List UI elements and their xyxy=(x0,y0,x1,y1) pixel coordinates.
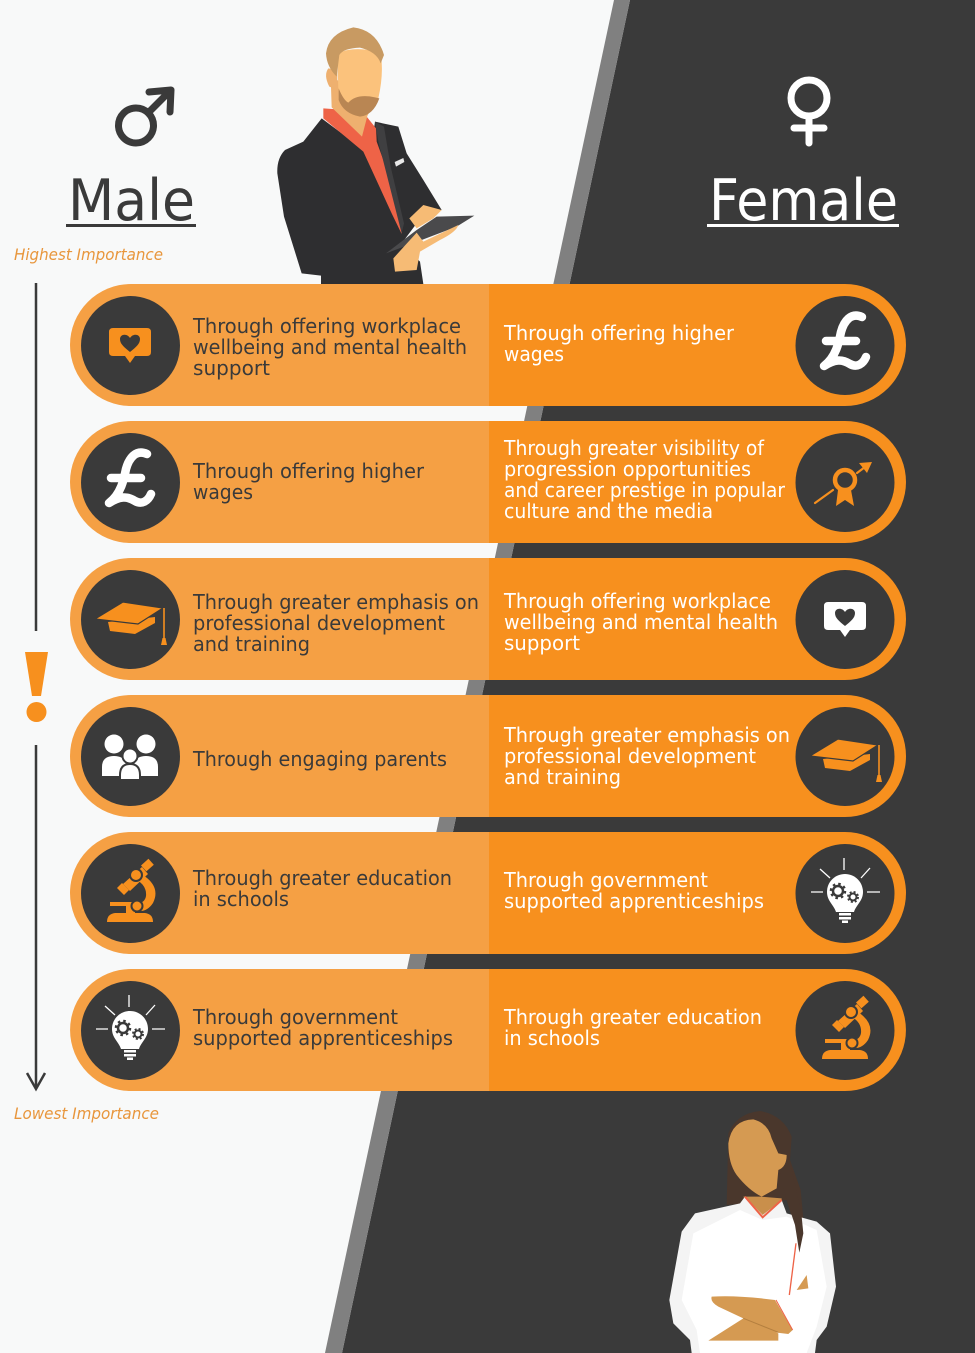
text: male rank 4: Through engaging parents xyxy=(192,747,447,771)
row 6 xyxy=(70,969,906,1091)
row 2 xyxy=(70,421,906,543)
icon: ribbon arrow xyxy=(815,462,872,506)
female symbol xyxy=(791,80,827,143)
row 4 xyxy=(70,695,906,817)
text: female rank 4: Through greater emphasis on xyxy=(503,723,790,747)
text: female rank 4: and training xyxy=(504,765,621,789)
icon: light bulb xyxy=(811,858,880,923)
text: female rank 2: Through greater visibility of xyxy=(503,436,765,460)
row 1 xyxy=(70,284,906,406)
icon: people xyxy=(102,734,158,780)
male symbol xyxy=(118,90,171,143)
icon: heart bubble xyxy=(109,328,151,363)
text: male rank 1: wellbeing and mental health xyxy=(193,335,467,359)
text: female rank 5: Through government xyxy=(503,868,708,892)
text: female rank 4: professional development xyxy=(504,744,756,768)
importance arrow xyxy=(27,283,45,1089)
text: male rank 1: support xyxy=(193,356,270,380)
label: lowest importance: Lowest Importance xyxy=(14,1104,159,1123)
text: male rank 3: professional development xyxy=(193,611,445,635)
text: male rank 6: supported apprenticeships xyxy=(193,1026,453,1050)
icon: microscope xyxy=(822,996,870,1059)
icon: pound xyxy=(824,316,866,366)
icon: pound xyxy=(109,453,151,503)
text: male rank 3: Through greater emphasis on xyxy=(192,590,479,614)
text: female rank 1: wages xyxy=(504,342,564,366)
text: female rank 2: progression opportunities xyxy=(504,457,751,481)
text: female rank 3: support xyxy=(504,631,580,655)
text: female rank 1: Through offering higher xyxy=(503,321,735,345)
heading: Female: Female xyxy=(709,168,898,234)
text: female rank 3: wellbeing and mental health xyxy=(504,610,778,634)
text: female rank 6: in schools xyxy=(504,1026,600,1050)
label: highest importance: Highest Importance xyxy=(14,245,163,264)
text: male rank 3: and training xyxy=(193,632,310,656)
icon: graduation cap xyxy=(95,602,167,645)
row 5 xyxy=(70,832,906,954)
text: male rank 2: Through offering higher xyxy=(192,459,425,483)
text: male rank 5: Through greater education xyxy=(192,866,452,890)
text: male rank 5: in schools xyxy=(193,887,289,911)
exclamation mark xyxy=(25,652,48,722)
text: female rank 2: culture and the media xyxy=(504,499,713,523)
icon: graduation cap xyxy=(810,739,882,782)
row 3 xyxy=(70,558,906,680)
text: male rank 6: Through government xyxy=(192,1005,398,1029)
illustration: woman chef xyxy=(669,1111,836,1353)
text: male rank 2: wages xyxy=(193,480,253,504)
text: female rank 6: Through greater education xyxy=(503,1005,762,1029)
icon: heart bubble xyxy=(824,602,866,637)
text: female rank 5: supported apprenticeships xyxy=(504,889,764,913)
icon: microscope xyxy=(107,859,155,922)
text: female rank 2: and career prestige in popular xyxy=(504,478,786,502)
heading: Male: Male xyxy=(68,168,195,234)
illustration: man with tablet xyxy=(277,27,474,284)
text: female rank 3: Through offering workplace xyxy=(503,589,771,613)
text: male rank 1: Through offering workplace xyxy=(192,314,461,338)
icon: light bulb xyxy=(96,995,165,1060)
